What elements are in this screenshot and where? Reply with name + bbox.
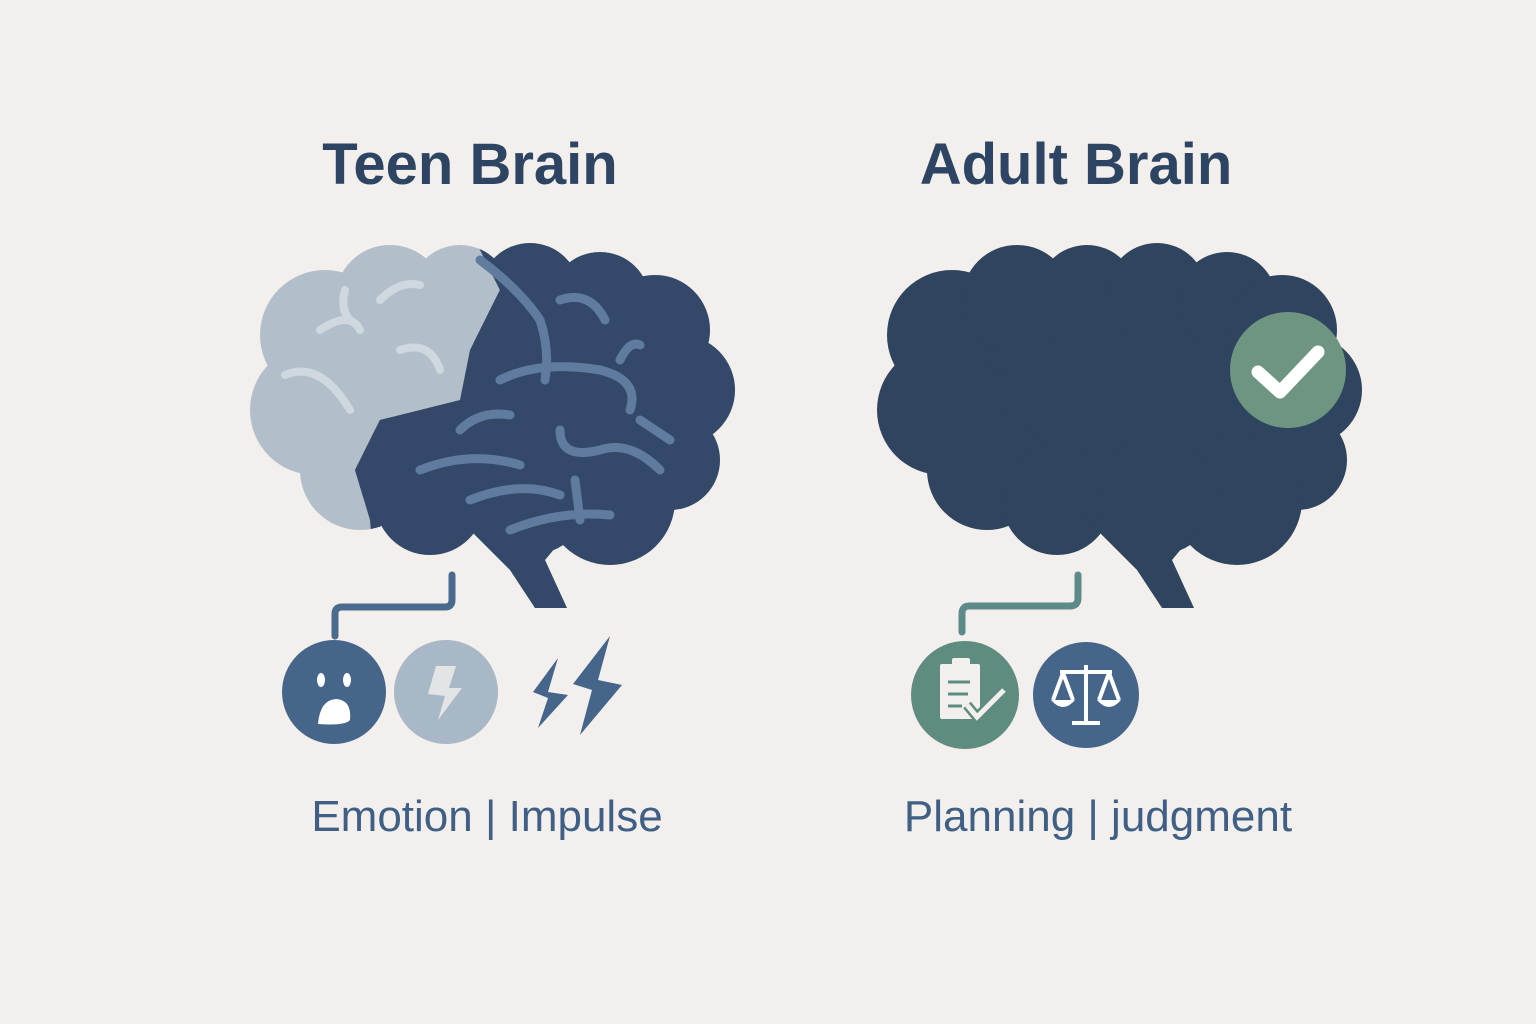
adult brain: [877, 243, 1362, 608]
label: teen: Emotion | Impulse: [311, 792, 663, 841]
label: adult: Planning | judgment: [904, 792, 1292, 841]
icon: lightning bolts: [533, 636, 622, 735]
icon: scales: [1033, 642, 1139, 748]
check badge: [1230, 312, 1346, 428]
illustration: [250, 243, 1362, 749]
teen brain: [250, 243, 735, 608]
title: adult brain: Adult Brain: [920, 132, 1232, 197]
icon: lightning circle: [394, 640, 498, 744]
connector: adult: [962, 575, 1078, 632]
title: teen brain: Teen Brain: [322, 132, 618, 197]
icon: shocked face: [282, 640, 386, 744]
connector: teen: [335, 575, 452, 636]
icon: clipboard: [911, 641, 1019, 749]
